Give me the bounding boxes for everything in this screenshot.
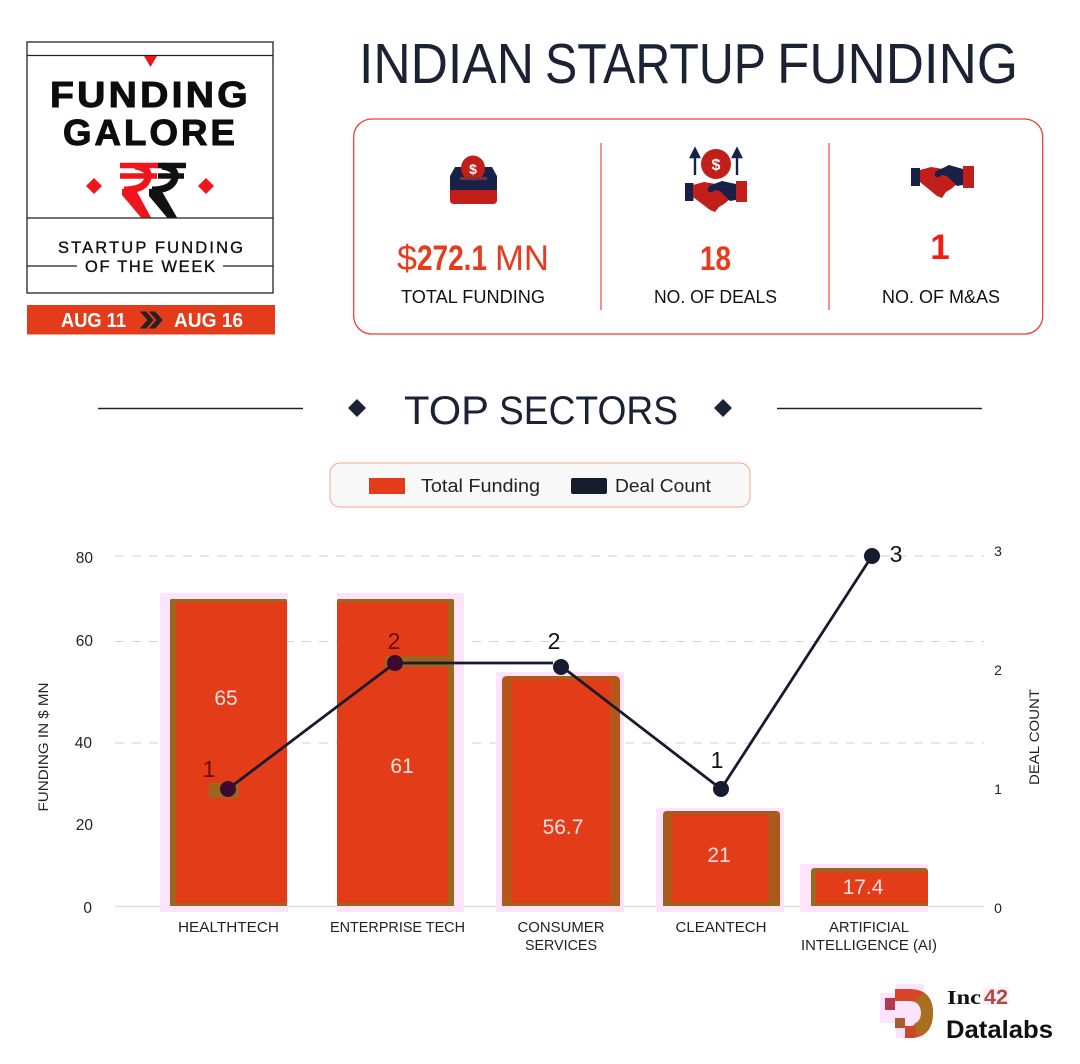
stat: total funding value: $ [397,239,417,278]
section heading: top sectors: SECTORS [499,389,678,433]
right axis labels [994,543,1002,916]
icon: datalabs mark [880,984,933,1038]
stat: total funding label: TOTAL FUNDING [401,287,545,307]
category labels: INTELLIGENCE (AI) [801,937,937,954]
bar: healthtech: 65 [214,687,238,710]
logo: inc42 datalabs [880,984,1053,1044]
deal count labels: 2 [388,628,400,654]
grid lines [115,556,984,743]
badge subtitle: OF THE WEEK [85,258,215,276]
title: INDIAN [359,32,534,96]
legend: Total Funding [421,476,540,496]
badge: funding galore [27,42,273,293]
stat: deals label: NO. OF DEALS [654,287,777,307]
deal count labels: 1 [711,747,723,773]
category labels: SERVICES [525,937,597,954]
badge subtitle [58,239,243,276]
badge heading: GALORE [63,112,238,153]
right axis labels: 2 [994,662,1002,678]
date banner [27,305,275,334]
icon: coin into box [450,156,497,204]
bar: consumer services: 56.7 [543,816,583,839]
badge heading: FUNDING [50,74,251,115]
stat: total funding value [397,239,549,278]
legend: Deal Count [615,476,711,496]
icon: deal handshake with coin: $ [712,157,721,174]
badge heading [50,74,251,153]
logo wordmark [946,986,1053,1044]
section heading: top sectors: TOP [404,389,489,433]
left axis labels: 60 [76,633,93,650]
deal count labels [203,541,902,782]
date banner: AUG 16 [174,310,243,332]
deal count labels: 2 [548,628,560,654]
bar: enterprise tech [337,593,464,912]
icon: handshake [911,165,974,198]
deal count line [220,548,880,797]
bar: consumer services [496,672,624,912]
left axis labels: 40 [75,735,92,752]
title [359,32,1018,96]
stat: total funding value: MN [495,239,549,278]
stat: total funding value: 272.1 [417,239,487,278]
bar: cleantech: 21 [707,844,731,867]
right axis labels: 1 [994,781,1002,797]
left axis labels: 20 [76,817,93,834]
right axis title: DEAL COUNT [1026,689,1042,785]
stat: m&as value: 1 [930,228,950,267]
bar: healthtech [160,593,288,912]
deal count labels: 3 [890,541,902,567]
category labels: ARTIFICIAL [829,919,909,936]
icon: red triangle [144,56,157,67]
logo wordmark: Datalabs [946,1016,1053,1044]
stat: m&as label: NO. OF M&AS [882,287,1000,307]
title: FUNDING [777,32,1018,96]
logo wordmark: 42 [984,986,1008,1009]
icon: coin into box: $ [469,161,477,177]
category labels [178,919,937,954]
left axis labels: 80 [76,550,93,567]
right axis labels: 0 [994,900,1002,916]
stat: deals value: 18 [700,240,731,278]
date banner: AUG 11 [61,310,126,332]
bar: artificial intelligence: 17.4 [843,876,884,899]
icon: deal handshake with coin [685,149,747,212]
chart: funding bars and deal count line [35,541,1042,954]
category labels: CONSUMER [518,919,605,936]
logo wordmark: Inc [947,987,981,1009]
panel: key statistics [354,119,1043,334]
category labels: ENTERPRISE TECH [330,919,465,936]
bar: enterprise tech: 61 [390,755,414,778]
bar: cleantech [656,808,784,912]
legend [330,463,750,507]
category labels: CLEANTECH [676,919,766,936]
category labels: HEALTHTECH [178,919,279,936]
right axis labels: 3 [994,543,1002,559]
icon: rupee symbols with diamonds [86,166,214,218]
left axis labels [75,550,93,917]
left axis title: FUNDING IN $ MN [35,682,51,812]
left axis labels: 0 [83,900,92,917]
badge subtitle: STARTUP FUNDING [58,239,243,257]
section heading: top sectors [98,389,982,433]
bar: artificial intelligence [800,864,928,912]
deal count labels: 1 [203,756,215,782]
title: STARTUP [545,32,766,96]
